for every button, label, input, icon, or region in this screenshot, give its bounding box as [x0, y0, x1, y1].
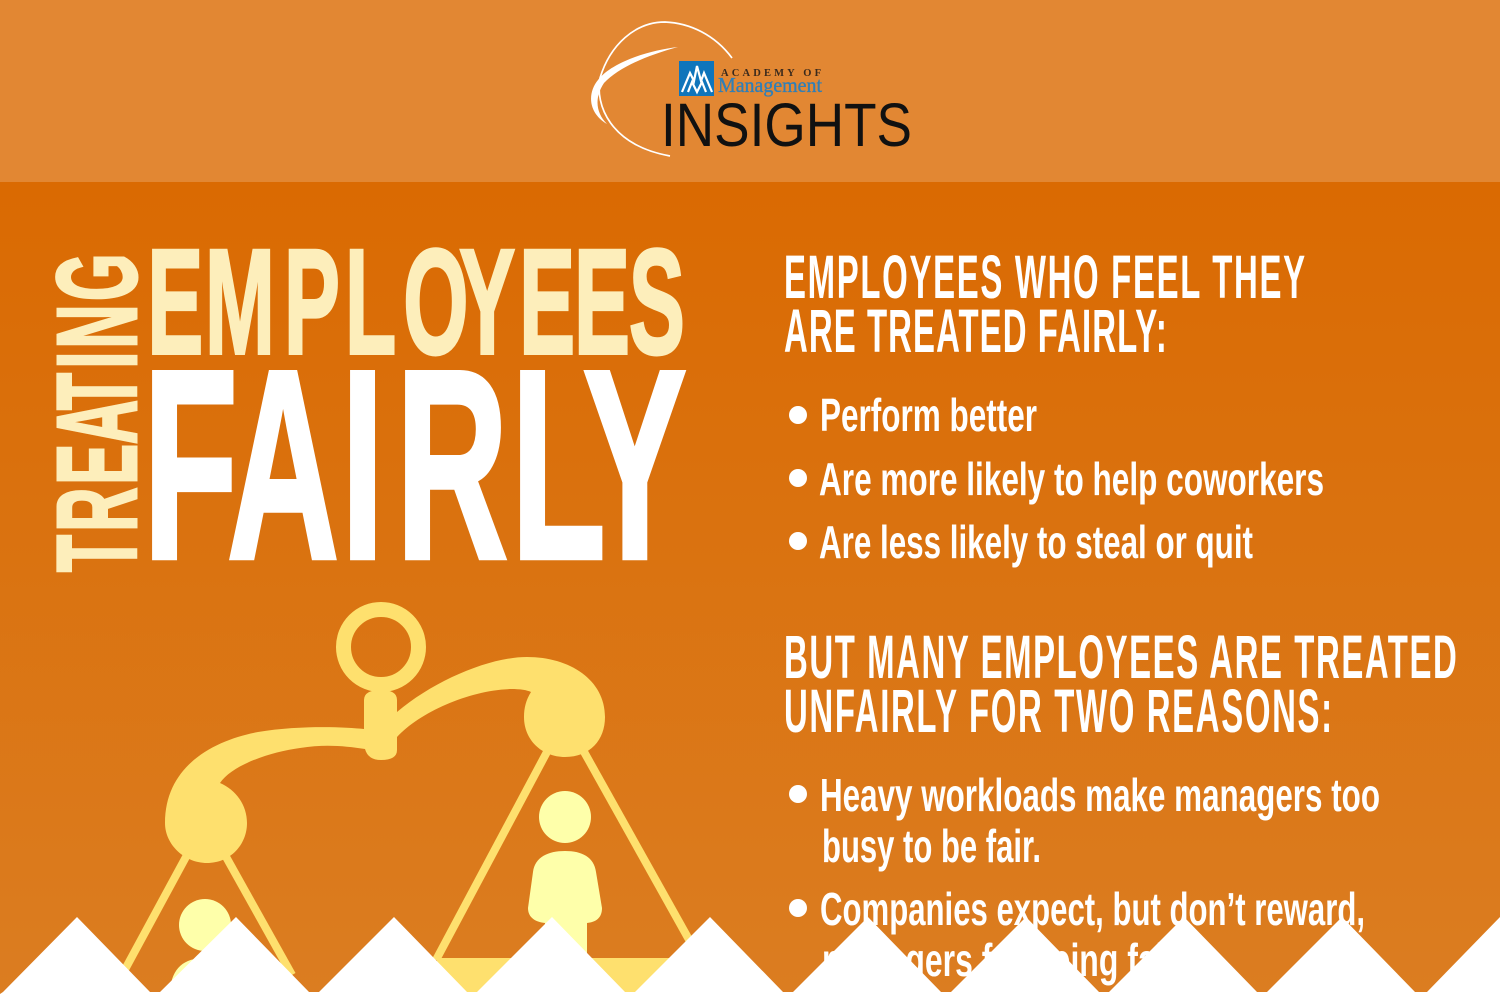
title [35, 218, 687, 616]
heading: two reasons: BUT MANY EMPLOYEES ARE TREATED [784, 624, 1457, 692]
scale pan [437, 958, 695, 998]
logo text: Insights: INSIGHTS [661, 91, 912, 159]
bullet list: benefits: Perform better [820, 389, 1037, 441]
bullet list: reasons: managers for being fair. [822, 934, 1184, 986]
heading: employees who feel fairly treated: EMPLOYEES WHO FEEL THEY [784, 244, 1305, 312]
heading: two reasons: UNFAIRLY FOR TWO REASONS: [784, 678, 1332, 746]
title word: Employees: EMPLOYEES [147, 218, 685, 386]
title word: Fairly: FAIRLY [143, 314, 687, 616]
bullet list: reasons: busy to be fair. [822, 820, 1041, 872]
title word: Treating: TREATING [35, 254, 161, 572]
logo: Academy of Management Insights [591, 22, 912, 159]
icon: balance scale [122, 610, 695, 998]
scale strings and plate [122, 750, 692, 975]
icon: white swoosh [591, 22, 732, 156]
logo text: Management: Management [718, 73, 822, 97]
bullet list: benefits: Are less likely to steal or quit [819, 516, 1253, 568]
panel: why fairness matters [784, 244, 1324, 568]
scale ring [344, 610, 418, 684]
bullet list: reasons [789, 769, 1380, 986]
person on left pan [170, 899, 240, 990]
logo text: Academy of: ACADEMY OF [721, 68, 821, 79]
header band [0, 0, 1500, 182]
icon: blue mountain square [679, 61, 714, 96]
scale beam [165, 657, 605, 863]
heading: employees who feel fairly treated [784, 244, 1305, 366]
heading: two reasons [784, 624, 1457, 746]
person on right pan [528, 791, 602, 960]
panel: why employees are treated unfairly [784, 624, 1457, 986]
heading: employees who feel fairly treated: ARE TREATED FAIRLY: [784, 298, 1167, 366]
bullet list: benefits [789, 389, 1324, 568]
torn paper zigzag edge [0, 917, 1500, 1000]
